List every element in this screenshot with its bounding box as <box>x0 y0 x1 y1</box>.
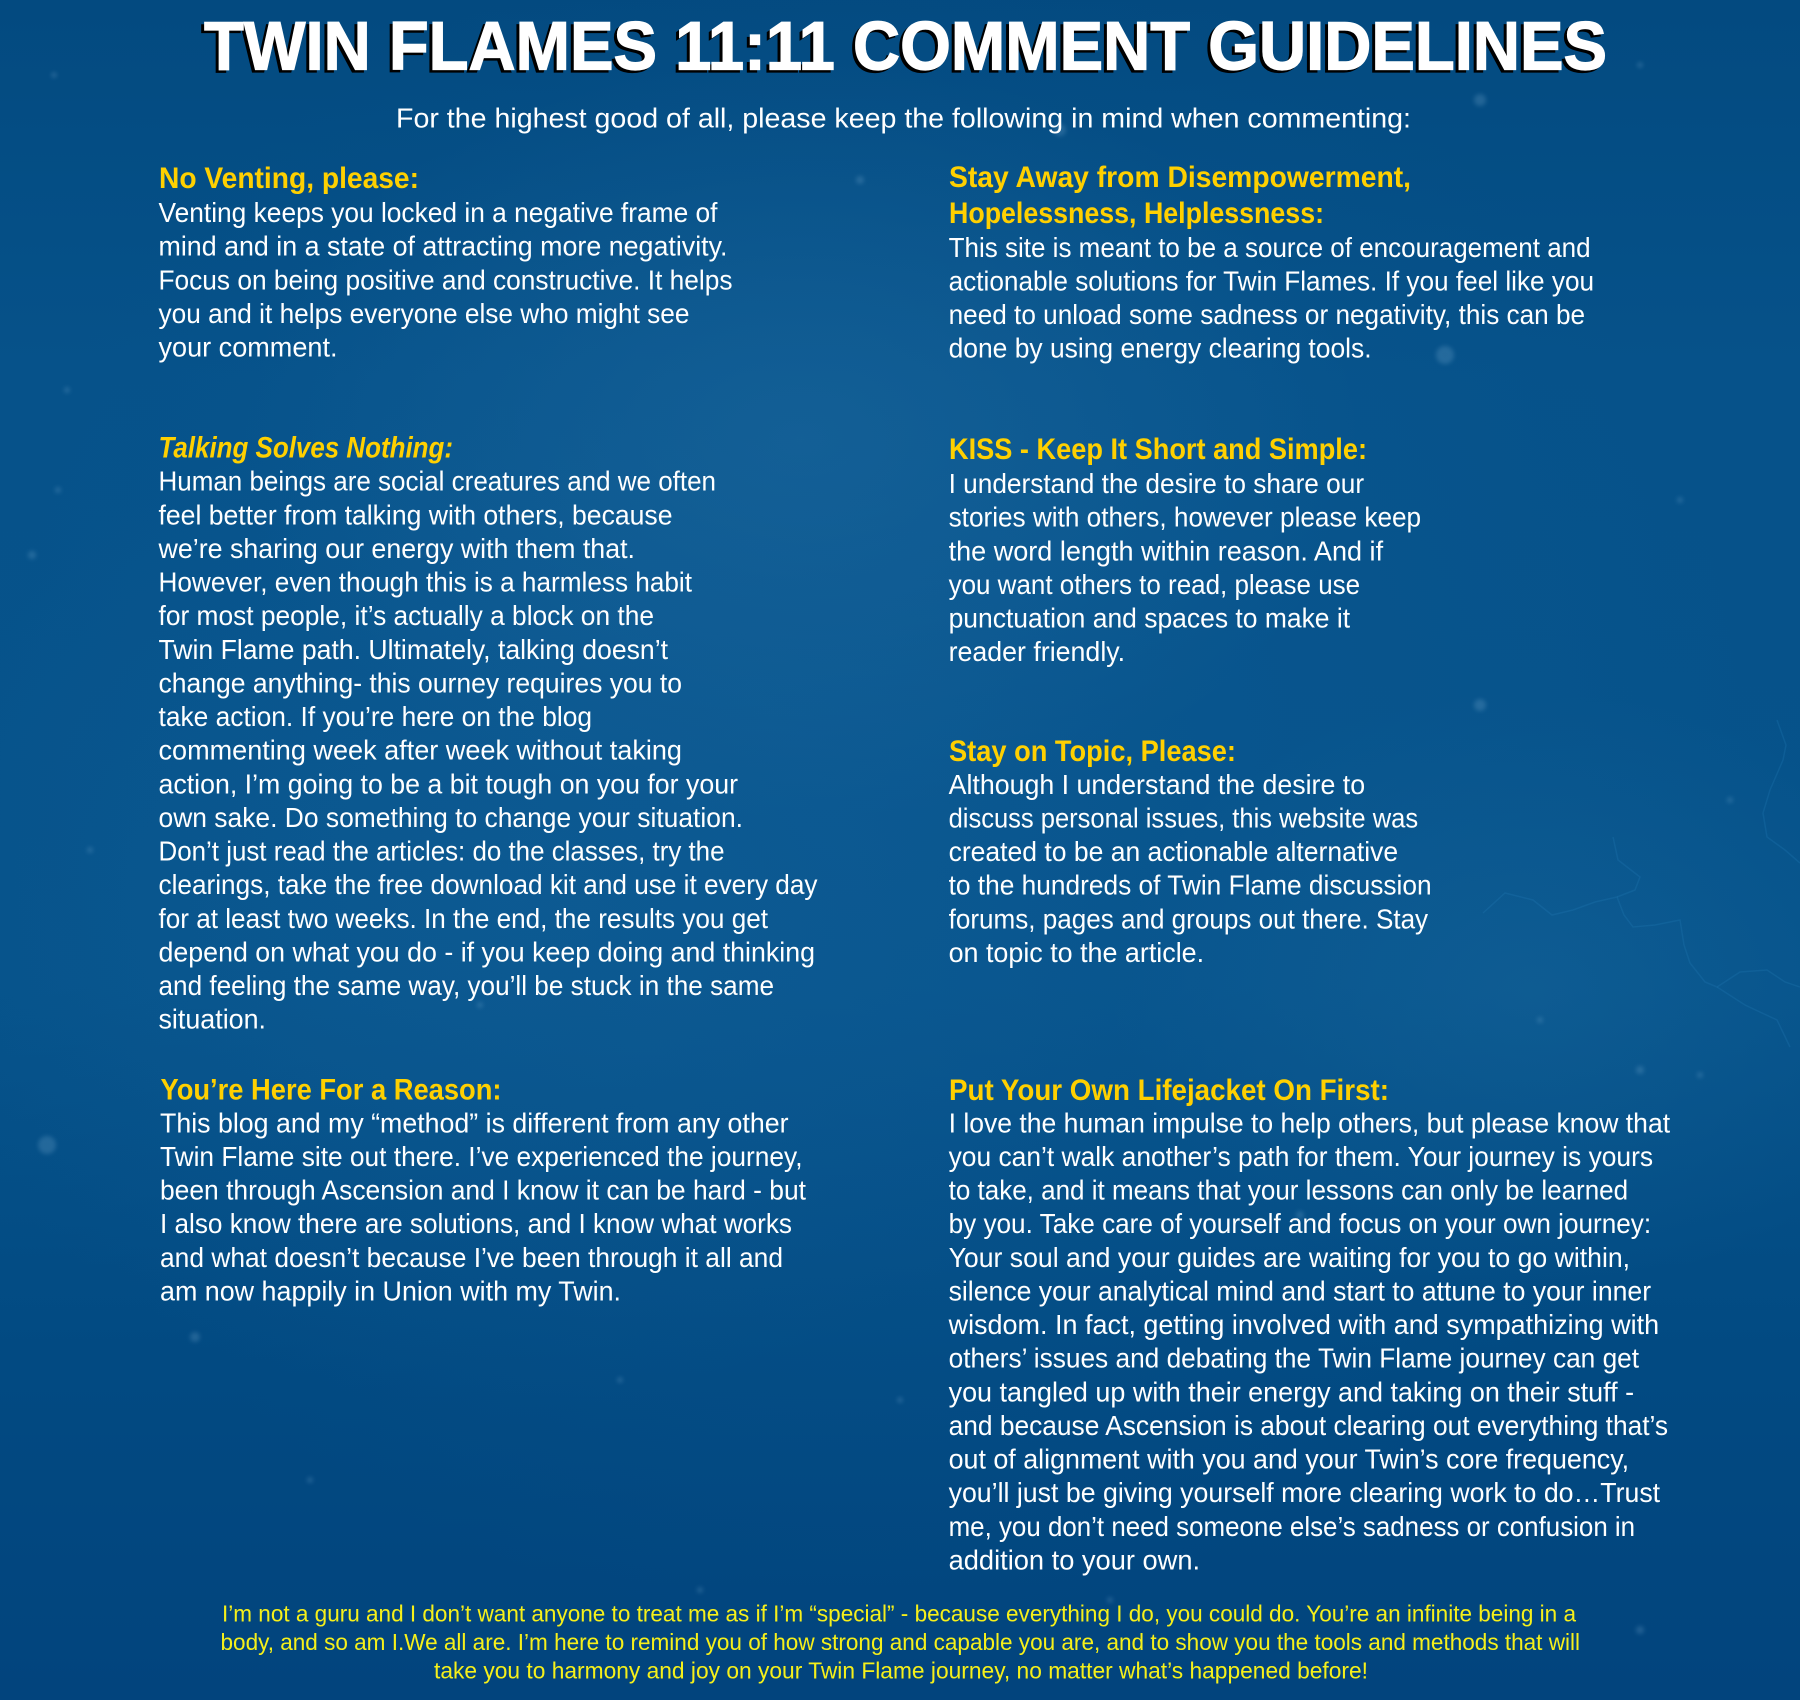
panel: Put Your Own Lifejacket On First: I love the human impulse to help others, but please know that <box>949 1107 1670 1138</box>
panel: Put Your Own Lifejacket On First: addition to your own. <box>949 1544 1200 1576</box>
panel: Put Your Own Lifejacket On First <box>948 1074 1670 1576</box>
panel: Talking Solves Nothing: Don’t just read the articles: do the classes, try the <box>158 836 724 867</box>
panel: You're Here For a Reason: You’re Here For a Reason: <box>160 1074 502 1106</box>
panel: KISS: you want others to read, please use <box>949 569 1360 600</box>
panel: Talking Solves Nothing: situation. <box>158 1004 266 1035</box>
panel: Stay on Topic: discuss personal issues, this website was <box>949 802 1418 833</box>
panel: Put Your Own Lifejacket On First: by you. Take care of yourself and focus on your own journey: <box>949 1208 1651 1239</box>
panel: You're Here For a Reason: This blog and my “method” is different from any other <box>160 1107 788 1138</box>
panel: No Venting: your comment. <box>158 332 338 362</box>
panel: Talking Solves Nothing: for at least two weeks. In the end, the results you get <box>158 903 768 934</box>
panel: Talking Solves Nothing: Twin Flame path. Ultimately, talking doesn’t <box>158 634 668 665</box>
panel: KISS: stories with others, however please keep <box>949 502 1421 533</box>
footer note <box>220 1600 1580 1684</box>
panel: Stay on Topic: on topic to the article. <box>949 937 1204 968</box>
panel: KISS: KISS - Keep It Short and Simple: <box>949 433 1367 466</box>
panel: Talking Solves Nothing: However, even though this is a harmless habit <box>158 567 692 598</box>
panel: Stay on Topic: created to be an actionable alternative <box>949 836 1398 867</box>
panel: You're Here For a Reason: been through Ascension and I know it can be hard - but <box>160 1175 806 1206</box>
panel: Talking Solves Nothing: feel better from talking with others, because <box>158 499 672 530</box>
panel: Put Your Own Lifejacket On First: and because Ascension is about clearing out everything that’s <box>949 1410 1668 1441</box>
panel: Put Your Own Lifejacket On First: wisdom. In fact, getting involved with and sympathizing with <box>948 1309 1659 1340</box>
panel: You're Here For a Reason <box>160 1074 806 1306</box>
panel: Put Your Own Lifejacket On First: to take, and it means that your lessons can only be learned <box>949 1175 1628 1206</box>
panel: Put Your Own Lifejacket On First: out of alignment with you and your Twin’s core frequency, <box>949 1444 1629 1475</box>
panel: Stay on Topic: forums, pages and groups out there. Stay <box>949 903 1428 934</box>
panel: Talking Solves Nothing: commenting week after week without taking <box>158 735 682 766</box>
panel: Talking Solves Nothing: Talking Solves Nothing: <box>158 432 453 465</box>
title: TWIN FLAMES 11:11 COMMENT GUIDELINES <box>204 8 1607 84</box>
panel: KISS: I understand the desire to share our <box>949 468 1364 499</box>
panel: No Venting: Focus on being positive and constructive. It helps <box>158 264 732 295</box>
panel: KISS: reader friendly. <box>949 636 1125 667</box>
title: TWIN FLAMES 11:11 COMMENT GUIDELINES <box>201 10 1604 87</box>
panel: You're Here For a Reason: Twin Flame site out there. I’ve experienced the journey, <box>160 1141 802 1172</box>
panel: You're Here For a Reason: am now happily in Union with my Twin. <box>160 1276 621 1306</box>
panel: Talking Solves Nothing: own sake. Do something to change your situation. <box>158 802 743 833</box>
panel: Stay Away from Disempowerment: Stay Away from Disempowerment, <box>949 161 1411 194</box>
panel: No Venting <box>158 162 732 362</box>
subtitle: For the highest good of all, please keep the following in mind when commenting: <box>396 102 1411 134</box>
panel: Talking Solves Nothing: depend on what you do - if you keep doing and thinking <box>158 936 815 968</box>
panel: You're Here For a Reason: and what doesn’t because I’ve been through it all and <box>160 1242 783 1273</box>
panel: Stay Away from Disempowerment: Hopelessness, Helplessness: <box>949 197 1324 230</box>
footer note: body, and so am I.We all are. I’m here to remind you of how strong and capable you are, and to show you the tools and methods that will <box>220 1629 1580 1655</box>
panel: Talking Solves Nothing: we’re sharing our energy with them that. <box>158 533 635 564</box>
footer note: take you to harmony and joy on your Twin Flame journey, no matter what’s happened before! <box>434 1658 1368 1684</box>
panel: Talking Solves Nothing: take action. If you’re here on the blog <box>158 701 592 732</box>
panel: KISS: the word length within reason. And if <box>949 535 1383 566</box>
panel: KISS: punctuation and spaces to make it <box>949 602 1350 634</box>
panel: Talking Solves Nothing: and feeling the same way, you’ll be stuck in the same <box>158 970 774 1001</box>
panel: Put Your Own Lifejacket On First: Put Your Own Lifejacket On First: <box>949 1074 1389 1107</box>
panel: Put Your Own Lifejacket On First: you’ll just be giving yourself more clearing work to do…Trust <box>949 1477 1660 1508</box>
panel: No Venting: you and it helps everyone else who might see <box>158 298 690 329</box>
panel: Talking Solves Nothing: action, I’m going to be a bit tough on you for your <box>158 768 738 799</box>
panel: Talking Solves Nothing: clearings, take the free download kit and use it every day <box>158 869 818 900</box>
panel: Stay Away from Disempowerment: need to unload some sadness or negativity, this can be <box>949 299 1585 330</box>
panel: Stay Away from Disempowerment: actionable solutions for Twin Flames. If you feel like you <box>949 266 1594 296</box>
panel: Talking Solves Nothing: Human beings are social creatures and we often <box>158 466 716 497</box>
panel: No Venting: mind and in a state of attracting more negativity. <box>158 231 728 262</box>
panel: No Venting: No Venting, please: <box>159 162 419 195</box>
panel: Put Your Own Lifejacket On First: Your soul and your guides are waiting for you to go within, <box>949 1242 1630 1273</box>
panel: Stay Away from Disempowerment: This site is meant to be a source of encouragement and <box>949 232 1591 263</box>
panel: Talking Solves Nothing <box>158 432 818 1035</box>
panel: Talking Solves Nothing: for most people, it’s actually a block on the <box>158 600 654 631</box>
footer note: I’m not a guru and I don’t want anyone to treat me as if I’m “special” - because everything I do, you could do. You’re an infinite being in a <box>222 1600 1576 1626</box>
panel: Put Your Own Lifejacket On First: silence your analytical mind and start to attune to your inner <box>949 1276 1651 1306</box>
panel: Put Your Own Lifejacket On First: others’ issues and debating the Twin Flame journey can get <box>949 1343 1639 1374</box>
panel: Talking Solves Nothing: change anything- this ourney requires you to <box>158 667 682 698</box>
panel: Stay on Topic <box>949 735 1432 968</box>
panel: Stay Away from Disempowerment: done by using energy clearing tools. <box>949 333 1372 364</box>
panel: Stay on Topic: to the hundreds of Twin Flame discussion <box>949 870 1432 901</box>
panel: Stay Away from Disempowerment <box>949 161 1594 364</box>
panel: Put Your Own Lifejacket On First: you can’t walk another’s path for them. Your journey is yours <box>949 1141 1653 1172</box>
panel: Put Your Own Lifejacket On First: me, you don’t need someone else’s sadness or confusion in <box>949 1511 1635 1542</box>
panel: You're Here For a Reason: I also know there are solutions, and I know what works <box>160 1208 792 1239</box>
panel: Stay on Topic: Stay on Topic, Please: <box>949 735 1236 768</box>
panel: Put Your Own Lifejacket On First: you tangled up with their energy and taking on their stuff - <box>949 1376 1634 1407</box>
panel: KISS <box>949 433 1421 667</box>
panel: No Venting: Venting keeps you locked in a negative frame of <box>158 197 718 228</box>
panel: Stay on Topic: Although I understand the desire to <box>949 769 1365 800</box>
